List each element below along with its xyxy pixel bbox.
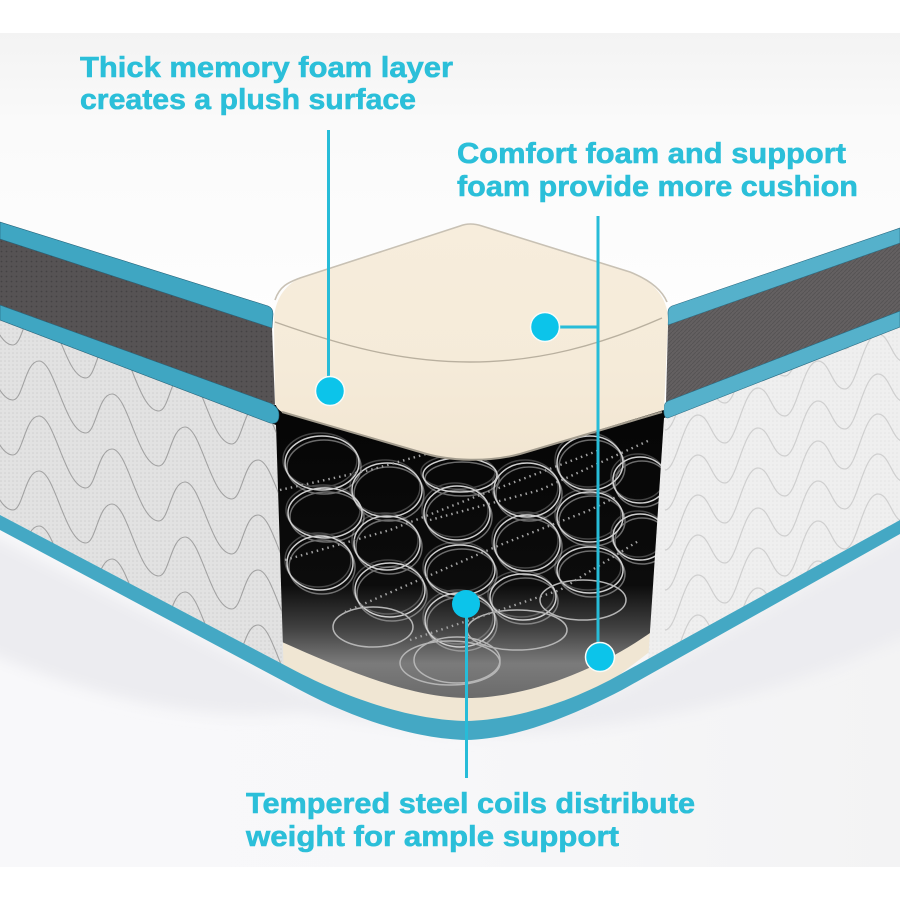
background: mattress top surface bbox=[0, 33, 900, 333]
background: floor area below the mattress bbox=[0, 500, 900, 867]
panel: steel coil compartment bbox=[270, 398, 669, 700]
heading text: Thick memory foam layer bbox=[80, 52, 453, 84]
leader line bbox=[327, 130, 330, 392]
bottom cream foam strip bbox=[283, 625, 652, 723]
right lower piping bbox=[664, 311, 900, 418]
callout: steel coils bbox=[245, 590, 695, 853]
foam top outline bbox=[275, 224, 667, 302]
lower faded coils bbox=[333, 580, 626, 685]
leader line bbox=[465, 604, 468, 778]
callout: memory foam bbox=[80, 52, 453, 406]
panel: right side of mattress bbox=[648, 228, 900, 670]
panel: left side of mattress bbox=[0, 222, 284, 664]
right dark mesh band bbox=[666, 243, 900, 402]
right upper piping bbox=[668, 228, 900, 325]
right quilted side panel bbox=[648, 328, 900, 658]
coil lacing wires bbox=[280, 440, 650, 640]
heading text: creates a plush surface bbox=[80, 84, 416, 116]
lower marker dot bbox=[586, 642, 614, 672]
coil background bbox=[270, 398, 668, 700]
foam bottom edge bbox=[282, 412, 662, 460]
marker dot bbox=[316, 376, 344, 406]
heading text: Tempered steel coils distribute bbox=[246, 788, 695, 820]
left dark mesh band bbox=[0, 238, 275, 405]
callout: comfort and support foam bbox=[457, 138, 858, 672]
heading text: Comfort foam and support bbox=[457, 138, 846, 170]
marker dot bbox=[452, 590, 480, 618]
heading text: foam provide more cushion bbox=[457, 171, 858, 203]
steel coils bbox=[280, 433, 669, 685]
shadow under mattress bbox=[0, 515, 900, 735]
foam layer seam bbox=[275, 318, 662, 362]
bottom blue piping bbox=[0, 515, 900, 740]
panel: foam layers block bbox=[274, 224, 668, 460]
left lower piping bbox=[0, 305, 279, 423]
foam block body bbox=[274, 224, 668, 460]
heading text: weight for ample support bbox=[245, 821, 619, 853]
left upper piping bbox=[0, 222, 273, 328]
left quilted side panel bbox=[0, 320, 284, 664]
leader lines bbox=[545, 216, 598, 657]
upper marker dot bbox=[530, 312, 560, 342]
